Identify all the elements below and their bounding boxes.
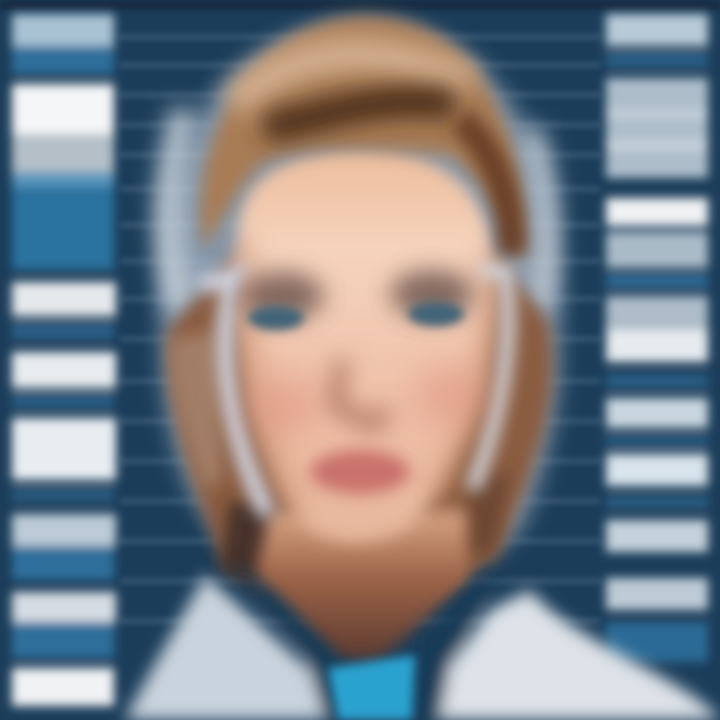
- tie: bright blue: [328, 655, 415, 720]
- top hair: [201, 16, 523, 265]
- lower hair: [168, 260, 552, 590]
- neck: [255, 510, 470, 660]
- side hair: pale highlights: [168, 110, 184, 310]
- eye sockets: [240, 272, 324, 320]
- jacket: white coat with collar: [125, 560, 720, 720]
- panel: right column: [606, 14, 708, 662]
- hair right dark side: [460, 120, 512, 255]
- cheek blush: [250, 375, 320, 435]
- hair halo outline: [163, 22, 559, 560]
- panel: left column: [12, 14, 116, 706]
- hair dark band: [265, 101, 455, 128]
- white inner strands: [198, 275, 268, 515]
- nose shadow: [334, 360, 388, 425]
- eyes: [248, 306, 304, 330]
- face edge shading: [244, 240, 489, 510]
- portrait: [163, 16, 559, 660]
- lips: [310, 450, 410, 494]
- face: [237, 150, 495, 542]
- hair light streak: [235, 55, 470, 105]
